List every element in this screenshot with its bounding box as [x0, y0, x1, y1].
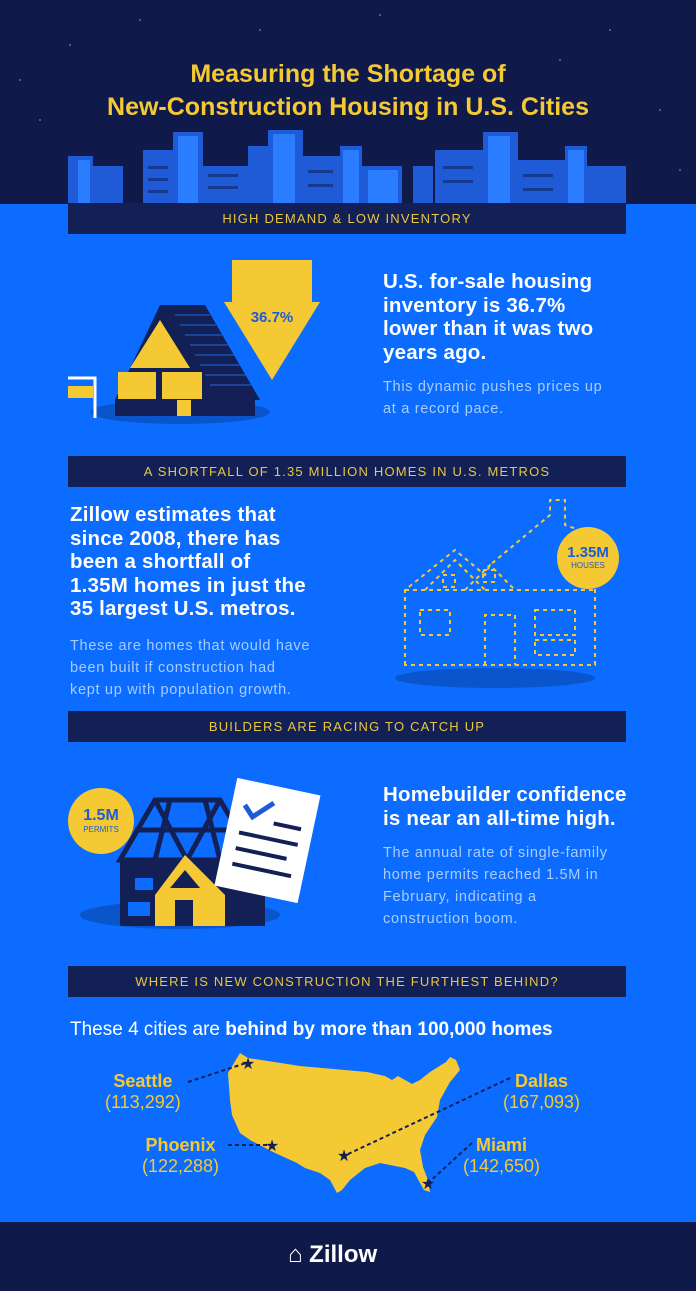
- text: shortfall: Zillow estimates that: [70, 503, 276, 526]
- text: inventory: lower than it was two: [383, 317, 593, 340]
- text: shortfall: kept up with population growth.: [70, 682, 292, 698]
- map: USA: [188, 1053, 510, 1193]
- label: Dallas: [503, 1071, 580, 1112]
- label: Miami: [463, 1135, 540, 1176]
- icon: dotted house: [395, 499, 596, 688]
- callout: 1.5M permits: PERMITS: [83, 825, 119, 834]
- label: Seattle: (113,292): [105, 1092, 181, 1112]
- banner: high demand: HIGH DEMAND & LOW INVENTORY: [222, 211, 472, 226]
- icon: house with down arrow: [68, 260, 320, 424]
- text: shortfall: 1.35M homes in just the: [70, 574, 306, 596]
- label: Phoenix: [142, 1135, 219, 1176]
- text: builder confidence: home permits reached 1.5M in: [383, 867, 598, 883]
- text: shortfall: 35 largest U.S. metros.: [70, 597, 296, 620]
- skyline: [68, 130, 626, 203]
- text: inventory: [383, 270, 602, 417]
- callout: 1.5M permits: [68, 788, 134, 854]
- label: Dallas: Dallas: [515, 1071, 568, 1091]
- text: shortfall: since 2008, there has: [70, 526, 280, 550]
- text: shortfall: [70, 503, 310, 698]
- map: USA: ★: [241, 1054, 255, 1073]
- text: builder confidence: is near an all-time high.: [383, 806, 616, 830]
- label: Seattle: Seattle: [113, 1071, 172, 1091]
- header background: [0, 0, 696, 204]
- callout: 1.35M houses: HOUSES: [571, 561, 605, 570]
- text: builder confidence: The annual rate of single-family: [383, 845, 608, 861]
- map: USA: ★: [421, 1174, 435, 1193]
- text: shortfall: been built if construction had: [70, 660, 276, 676]
- callout: 1.5M permits: 1.5M: [83, 807, 119, 824]
- text: builder confidence: [383, 783, 627, 927]
- label: Seattle: [105, 1071, 181, 1112]
- label: Miami: (142,650): [463, 1156, 540, 1176]
- banner: where: WHERE IS NEW CONSTRUCTION THE FURTHEST BEHIND?: [135, 974, 559, 989]
- icon: house frame with permit: [80, 778, 320, 929]
- banner: where: [68, 966, 626, 997]
- banner: shortfall: A SHORTFALL OF 1.35 MILLION HOMES IN U.S. METROS: [144, 464, 550, 479]
- banner: shortfall: [68, 456, 626, 487]
- text: inventory: This dynamic pushes prices up: [383, 379, 602, 395]
- title: New-Construction Housing in U.S. Cities: [107, 93, 589, 121]
- icon: house with down arrow: 36.7%: [251, 309, 293, 326]
- logo: Zillow: ⌂ Zillow: [288, 1241, 377, 1268]
- text: builder confidence: February, indicating a: [383, 889, 537, 905]
- text: inventory: at a record pace.: [383, 401, 504, 417]
- label: Miami: Miami: [476, 1135, 527, 1155]
- title: [107, 60, 589, 121]
- banner: builders: [68, 711, 626, 742]
- label: Dallas: (167,093): [503, 1092, 580, 1112]
- label: Phoenix: (122,288): [142, 1156, 219, 1176]
- text: builder confidence: Homebuilder confidence: [383, 783, 627, 806]
- text: builder confidence: construction boom.: [383, 911, 518, 927]
- banner: builders: BUILDERS ARE RACING TO CATCH UP: [209, 719, 485, 734]
- map: USA: ★: [337, 1146, 351, 1165]
- text: shortfall: These are homes that would have: [70, 638, 310, 654]
- callout: 1.35M houses: [557, 527, 619, 589]
- map: USA: ★: [265, 1136, 279, 1155]
- footer: [0, 1222, 696, 1291]
- callout: 1.35M houses: 1.35M: [567, 544, 609, 561]
- banner: high demand: [68, 203, 626, 234]
- text: shortfall: been a shortfall of: [70, 550, 250, 573]
- text: inventory: inventory is 36.7%: [383, 294, 566, 316]
- text: inventory: years ago.: [383, 340, 486, 364]
- title: Measuring the Shortage of: [190, 60, 506, 88]
- subheading: 4 cities: These 4 cities are behind by more than 100,000 homes: [70, 1019, 553, 1040]
- text: inventory: U.S. for-sale housing: [383, 270, 592, 293]
- label: Phoenix: Phoenix: [146, 1135, 216, 1155]
